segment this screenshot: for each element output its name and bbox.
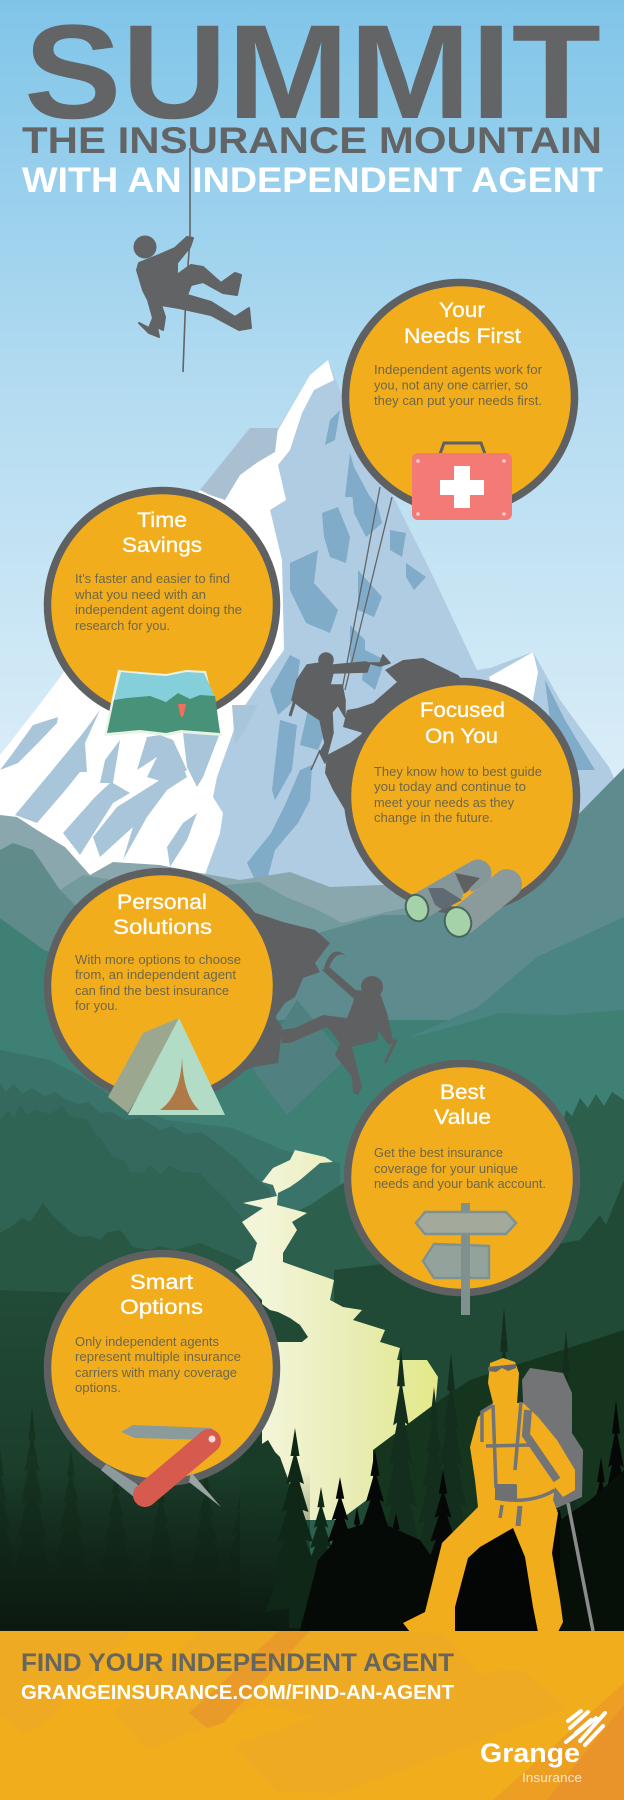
heading: Savings xyxy=(122,533,202,557)
grange logo: Insurance xyxy=(522,1770,582,1785)
hiker xyxy=(403,1358,593,1632)
body text xyxy=(75,952,241,1013)
heading: Best xyxy=(440,1080,485,1104)
heading xyxy=(420,698,505,748)
forest layers left xyxy=(0,1050,340,1400)
body text xyxy=(75,1334,241,1395)
heading xyxy=(122,508,202,557)
rock at focused on you xyxy=(325,658,480,830)
heading: Smart xyxy=(130,1270,193,1294)
sky background xyxy=(0,0,624,900)
body text: They know how to best guide xyxy=(374,764,542,779)
heading: Focused xyxy=(420,698,505,722)
heading: Value xyxy=(434,1105,491,1129)
body text xyxy=(374,362,543,408)
middle climber xyxy=(290,653,390,770)
foreground forest xyxy=(0,1290,624,1640)
body text: Get the best insurance xyxy=(374,1145,503,1160)
heading: Your xyxy=(439,298,485,322)
heading xyxy=(404,298,521,348)
panel: best value xyxy=(348,1064,576,1315)
panel: focused on you xyxy=(348,682,576,941)
snow on left face xyxy=(0,360,334,880)
body text: options. xyxy=(75,1380,121,1395)
panel: your needs first xyxy=(346,282,574,520)
badge circle xyxy=(348,682,576,910)
trekking pole xyxy=(568,1503,593,1631)
body text xyxy=(374,764,542,825)
badge circle xyxy=(48,490,276,720)
sunglasses xyxy=(488,1364,516,1372)
icon: signpost xyxy=(416,1203,516,1315)
upper climber xyxy=(134,236,251,337)
heading: On You xyxy=(425,724,498,748)
body text: you, not any one carrier, so xyxy=(374,378,528,392)
body text: With more options to choose xyxy=(75,952,241,967)
icon: first aid kit xyxy=(412,443,512,520)
camera xyxy=(495,1484,517,1500)
body text: what you need with an xyxy=(74,587,206,602)
ground shading xyxy=(0,1470,310,1640)
forest layers right xyxy=(262,1092,624,1660)
backpack xyxy=(522,1368,583,1508)
heading xyxy=(434,1080,491,1129)
body text: they can put your needs first. xyxy=(374,393,542,408)
rock at personal solutions xyxy=(200,907,330,1073)
background below sky xyxy=(0,860,624,1650)
badge circle xyxy=(348,1064,576,1292)
heading xyxy=(113,890,212,939)
body text: needs and your bank account. xyxy=(374,1176,546,1191)
panel: personal solutions xyxy=(48,872,276,1115)
backpack straps xyxy=(482,1402,557,1526)
heading: Time xyxy=(137,508,187,532)
website url: GRANGEINSURANCE.COM/FIND-AN-AGENT xyxy=(21,1682,454,1704)
panel: time savings xyxy=(48,490,276,736)
body text: you today and continue to xyxy=(374,779,526,794)
title xyxy=(22,0,603,200)
river island xyxy=(262,1304,308,1342)
body text: Only independent agents xyxy=(75,1334,219,1349)
icon: pocket knife xyxy=(101,1425,221,1507)
body text: carriers with many coverage xyxy=(75,1365,237,1380)
body text: Independent agents work for xyxy=(374,362,543,377)
icon: binoculars xyxy=(402,873,507,941)
panel: smart options xyxy=(48,1254,276,1507)
shadow patches xyxy=(247,410,595,880)
heading: Options xyxy=(120,1295,203,1319)
body text: change in the future. xyxy=(374,810,493,825)
body text xyxy=(74,571,242,633)
heading xyxy=(120,1270,203,1319)
body text: independent agent doing the xyxy=(75,602,242,617)
body text: coverage for your unique xyxy=(374,1161,518,1176)
body text: from, an independent agent xyxy=(75,967,236,982)
title: WITH AN INDEPENDENT AGENT xyxy=(22,161,603,200)
grange logo: Grange xyxy=(480,1738,580,1768)
title: THE INSURANCE MOUNTAIN xyxy=(22,120,602,161)
river xyxy=(235,1150,438,1520)
heading: Needs First xyxy=(404,324,521,348)
body text: represent multiple insurance xyxy=(75,1349,241,1364)
heading: Personal xyxy=(117,890,207,914)
distant ridges xyxy=(0,768,624,1250)
footer band xyxy=(0,1631,624,1800)
body text: It's faster and easier to find xyxy=(75,571,230,586)
mountain xyxy=(0,360,624,900)
body text: research for you. xyxy=(75,618,170,633)
rope xyxy=(183,148,190,372)
body text xyxy=(374,1145,546,1191)
call to action heading: FIND YOUR INDEPENDENT AGENT xyxy=(21,1649,454,1677)
badge circle xyxy=(48,1254,276,1482)
ropes to middle climber xyxy=(342,487,392,690)
badge circle xyxy=(346,282,574,512)
heading: Solutions xyxy=(113,915,212,939)
body text: can find the best insurance xyxy=(75,983,229,998)
title: SUMMIT xyxy=(24,0,601,147)
body text: meet your needs as they xyxy=(374,795,514,810)
badge circle xyxy=(48,872,276,1100)
body text: for you. xyxy=(75,998,118,1013)
icon: tent xyxy=(108,1018,225,1115)
hiker body xyxy=(403,1358,575,1632)
icon: map xyxy=(104,670,222,736)
grange logo xyxy=(480,1711,605,1785)
lower climber xyxy=(280,952,397,1095)
